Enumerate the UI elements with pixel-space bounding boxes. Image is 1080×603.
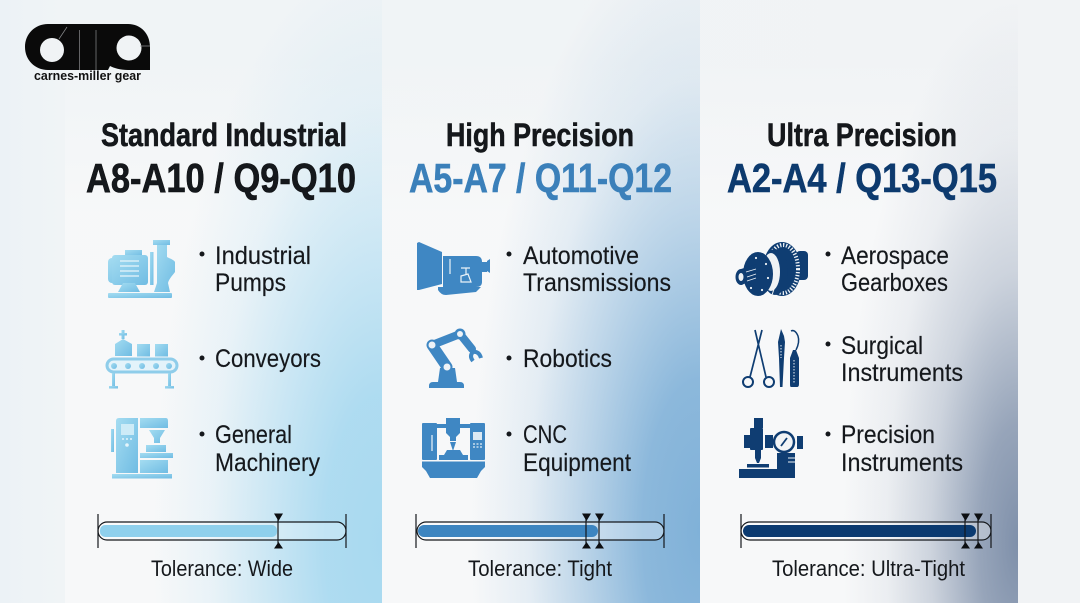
heading: high precision: A5-A7 / Q11-Q12	[409, 155, 672, 201]
heading: ultra precision	[727, 117, 997, 201]
icon: CNC equipment	[422, 418, 485, 478]
label: tolerance wide: Tolerance: Wide	[151, 556, 293, 581]
text: automotive transmissions: Transmissions	[523, 269, 671, 297]
icon: robotic arm	[428, 328, 481, 388]
icon: automotive transmission	[417, 242, 490, 295]
heading: standard industrial: Standard Industrial	[101, 117, 347, 153]
text: surgical instruments	[826, 332, 963, 387]
text: industrial pumps: Pumps	[215, 269, 286, 297]
text: CNC equipment: CNC	[523, 421, 567, 449]
tolerance bar: ultra-tight	[741, 514, 991, 548]
text: robotics: Robotics	[523, 345, 612, 373]
text: automotive transmissions: Automotive	[523, 242, 639, 270]
icon: industrial pump	[108, 240, 175, 298]
text: surgical instruments: Surgical	[841, 332, 923, 360]
text: aerospace gearboxes	[826, 242, 949, 297]
logo: carnes-miller gear	[25, 24, 150, 83]
panel: high precision	[382, 0, 700, 603]
heading: high precision	[409, 117, 672, 201]
icon: precision instrument	[739, 418, 803, 478]
label: tolerance ultra-tight: Tolerance: Ultra-Tight	[772, 556, 965, 581]
heading: high precision: High Precision	[446, 117, 634, 153]
icon: conveyor	[107, 330, 177, 388]
text: automotive transmissions	[506, 242, 671, 297]
text: aerospace gearboxes: Aerospace	[841, 242, 949, 270]
text: surgical instruments: Instruments	[841, 359, 963, 387]
icon: surgical instruments	[743, 329, 799, 387]
text: general machinery: Machinery	[215, 449, 320, 477]
text: precision instruments: Precision	[841, 421, 935, 449]
panel: ultra precision	[700, 0, 1018, 603]
text: general machinery: General	[215, 421, 292, 449]
text: precision instruments	[826, 421, 963, 477]
text: conveyors: Conveyors	[215, 345, 321, 373]
heading: ultra precision: A2-A4 / Q13-Q15	[727, 155, 997, 201]
text: industrial pumps: Industrial	[215, 242, 311, 270]
logo: carnes-miller gear: carnes-miller gear	[34, 69, 141, 83]
tolerance bar: tight	[416, 514, 664, 548]
text: general machinery	[200, 421, 320, 477]
icon: general machinery	[111, 418, 173, 478]
text: industrial pumps	[200, 242, 311, 297]
text: CNC equipment	[506, 421, 631, 477]
text: aerospace gearboxes: Gearboxes	[841, 269, 948, 297]
heading: standard industrial: A8-A10 / Q9-Q10	[86, 155, 356, 201]
label: tolerance tight: Tolerance: Tight	[468, 556, 612, 581]
heading: standard industrial	[86, 117, 356, 201]
icon: aerospace gearbox	[736, 242, 808, 296]
text: precision instruments: Instruments	[841, 449, 963, 477]
tolerance bar: wide	[98, 514, 346, 548]
text: CNC equipment: Equipment	[523, 449, 631, 477]
heading: ultra precision: Ultra Precision	[767, 117, 957, 153]
panel: standard industrial	[65, 0, 382, 603]
